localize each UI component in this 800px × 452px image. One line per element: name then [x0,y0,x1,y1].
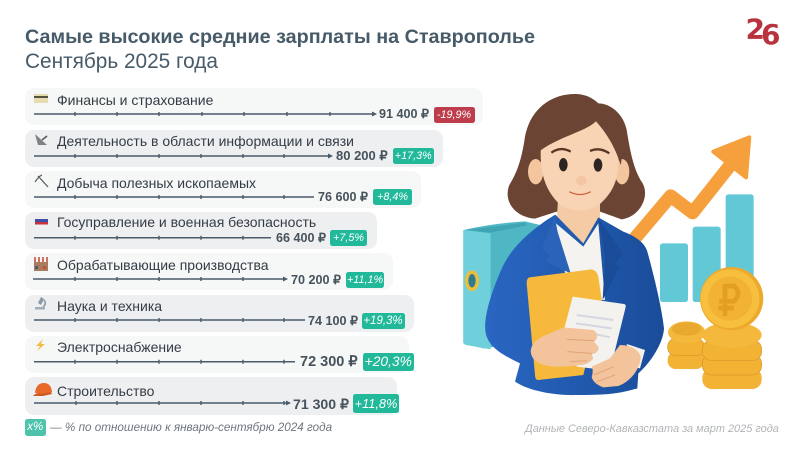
icon: folder and paper [527,269,626,380]
subtitle: Сентябрь 2025 года [25,50,218,73]
change badge [392,148,434,164]
row label: Финансы и страхование [57,92,213,108]
change badge [330,230,367,246]
icon: flag [35,219,48,224]
panel: IT [25,130,443,166]
legend badge: x% [27,421,43,433]
icon: credit card [34,94,48,103]
salary bar [34,360,295,364]
panel: government [25,212,377,249]
change badge: +8,4% [377,191,408,203]
legend text: — % по отношению к январю-сентябрю 2024 года [50,421,332,434]
hands [531,327,645,387]
title: Самые высокие средние зарплаты на Ставрополье [25,26,535,48]
icon: satellite dish [35,134,48,145]
change badge: -19,9% [437,108,471,120]
panel: construction [25,377,397,415]
change badge: +11,8% [355,396,397,411]
value: 80 200 ₽ [336,148,388,162]
change badge [434,106,474,122]
row label: Строительство [57,383,154,399]
row label: Деятельность в области информации и связи [57,133,354,149]
salary bar [34,400,291,406]
row label: Наука и техника [57,298,162,314]
value: 66 400 ₽ [276,231,326,245]
change badge [362,312,404,329]
row label: Госуправление и военная безопасность [57,214,316,230]
change badge: +7,5% [333,232,364,244]
bar chart [660,194,754,302]
figure: woman [485,94,664,395]
icon: coin stacks [668,267,763,389]
change badge: +17,3% [395,150,432,162]
icon: lightning [36,339,45,351]
value: 91 400 ₽ [379,107,429,121]
value: 71 300 ₽ [293,396,349,412]
source note: Данные Северо-Кавказстата за март 2025 года [525,423,779,435]
panel: finance [25,88,483,125]
row label: Обрабатывающие производства [57,257,269,273]
value: 76 600 ₽ [318,190,368,204]
panel: mining [25,170,421,208]
logo: 26: 2 [746,12,765,46]
row label: Электроснабжение [57,339,182,355]
row label: Добыча полезных ископаемых [57,175,256,191]
arrow: growth [634,137,749,239]
panel: electricity [25,336,409,373]
panel: science [25,295,414,332]
change badge: +19,3% [363,314,403,326]
panel: manufacturing [25,253,393,290]
logo: 26: 6 [761,18,780,51]
salary bar [34,318,305,322]
change badge [373,189,412,205]
salary bar [34,195,314,199]
change badge: +20,3% [365,354,412,369]
icon: binder [463,221,540,349]
icon: pick [34,174,48,188]
salary bar [34,236,271,240]
value: 74 100 ₽ [308,314,358,328]
icon: factory [34,257,48,271]
value: 72 300 ₽ [300,354,358,370]
salary bar [34,112,377,116]
value: 70 200 ₽ [291,272,341,286]
icon: microscope [35,297,46,310]
legend badge [25,419,46,436]
salary bar [34,154,333,158]
icon: helmet [33,383,52,396]
change badge: +11,1% [347,274,383,286]
salary bar [33,276,288,282]
